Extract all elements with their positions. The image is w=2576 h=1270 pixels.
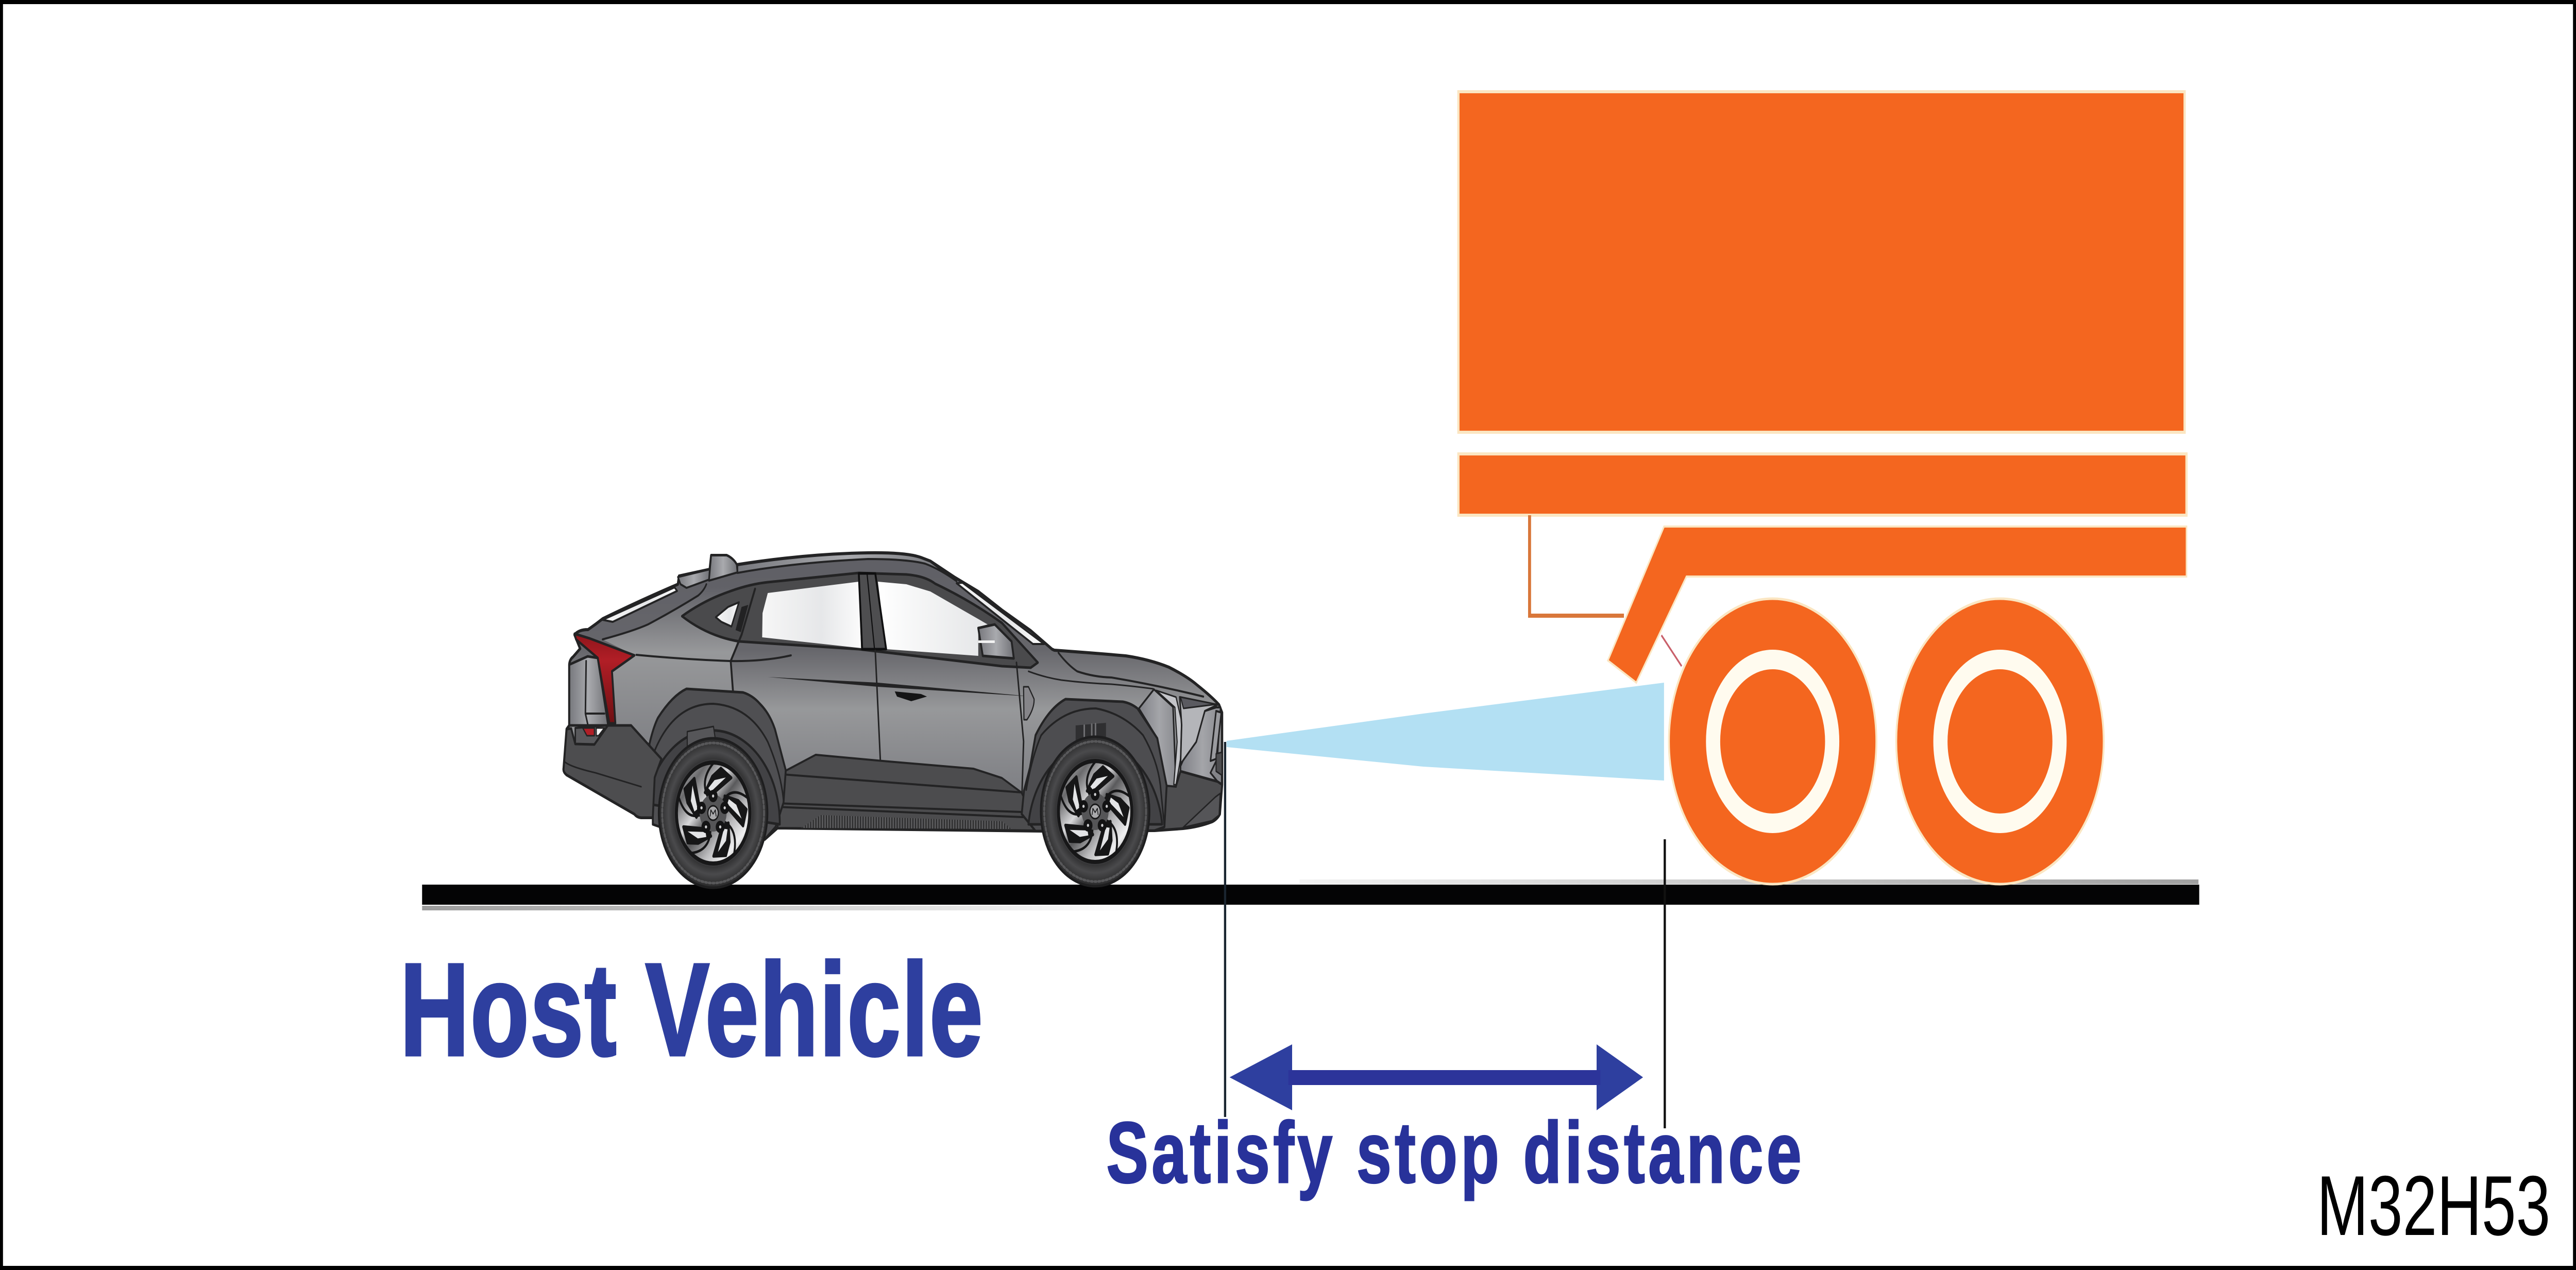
rear door window: [762, 582, 861, 648]
lower intake: [1183, 793, 1220, 827]
rear wheel arch: [650, 689, 786, 845]
front wheel well: [1028, 743, 1162, 824]
windshield: [957, 583, 1044, 644]
quarter glass: [716, 602, 739, 626]
double-headed distance arrow: [1230, 1044, 1643, 1110]
extension line at truck wheel: [1664, 839, 1666, 1128]
door character line: [768, 677, 1033, 697]
figure code: M32H53: [2317, 1158, 2550, 1253]
truck underrun bracket: [1530, 515, 1624, 616]
label: Host Vehicle: Host Vehicle: [400, 936, 983, 1083]
headlight upper bar: [1180, 697, 1216, 708]
truck: lead vehicle: [1459, 92, 2187, 884]
rear quarter panel: [603, 584, 755, 744]
rear bumper: [564, 725, 662, 818]
rear wheel well: [647, 731, 780, 824]
charge port door: [1024, 687, 1034, 720]
rear panel: [569, 656, 608, 725]
lower rear recess: [575, 725, 608, 744]
front grille slit: [1211, 711, 1222, 761]
rear reflector: [583, 728, 595, 736]
door handle: [895, 691, 927, 701]
car body silhouette: [564, 553, 1222, 845]
truck chassis rail: [1459, 454, 2187, 515]
sill lines: [776, 774, 1036, 818]
front door window: [878, 582, 988, 656]
headlight: [1180, 697, 1217, 764]
reverse lamp: [596, 728, 604, 736]
sensor beam: [1227, 683, 1664, 781]
label: Satisfy stop distance: Satisfy stop distance: [1106, 1105, 1802, 1201]
front wheel: [1041, 737, 1149, 886]
front wheel arch: [1022, 699, 1166, 831]
front bumper cladding: [1142, 771, 1222, 831]
truck fender link: [1662, 635, 1682, 666]
truck fender bar: [1608, 527, 2187, 683]
host vehicle car: [564, 553, 1222, 888]
front side panel: [1139, 689, 1176, 787]
side vent: [802, 815, 1012, 829]
body crease lines: [603, 584, 1204, 815]
B pillar: [859, 573, 886, 649]
side mirror: [978, 624, 1014, 658]
truck rear wheel 1: [1669, 599, 1876, 884]
tail light: [574, 634, 634, 723]
greenhouse frame: [682, 573, 1038, 668]
extension line at car front: [1224, 742, 1226, 1117]
spoiler: [678, 569, 710, 588]
front bumper lip: [1216, 752, 1222, 775]
front light strip: [1156, 690, 1182, 785]
shark fin antenna: [709, 555, 737, 581]
bumper crease: [565, 761, 641, 787]
truck rear wheel 2: [1896, 599, 2104, 884]
rear windshield: [603, 587, 677, 622]
rear well liner: [687, 726, 715, 747]
rear door handle recess: [736, 605, 748, 632]
truck cargo box: [1459, 92, 2184, 432]
front arch inner ring: [1026, 708, 1164, 827]
side sill cladding: [777, 755, 1040, 831]
front fascia panel: [1180, 707, 1221, 782]
rear wheel: [659, 738, 768, 888]
roof rail: [737, 553, 957, 581]
front well vent: [1076, 723, 1106, 742]
rear arch inner ring: [655, 704, 784, 800]
ground line: [422, 879, 2199, 910]
rear panel seam: [585, 661, 604, 725]
